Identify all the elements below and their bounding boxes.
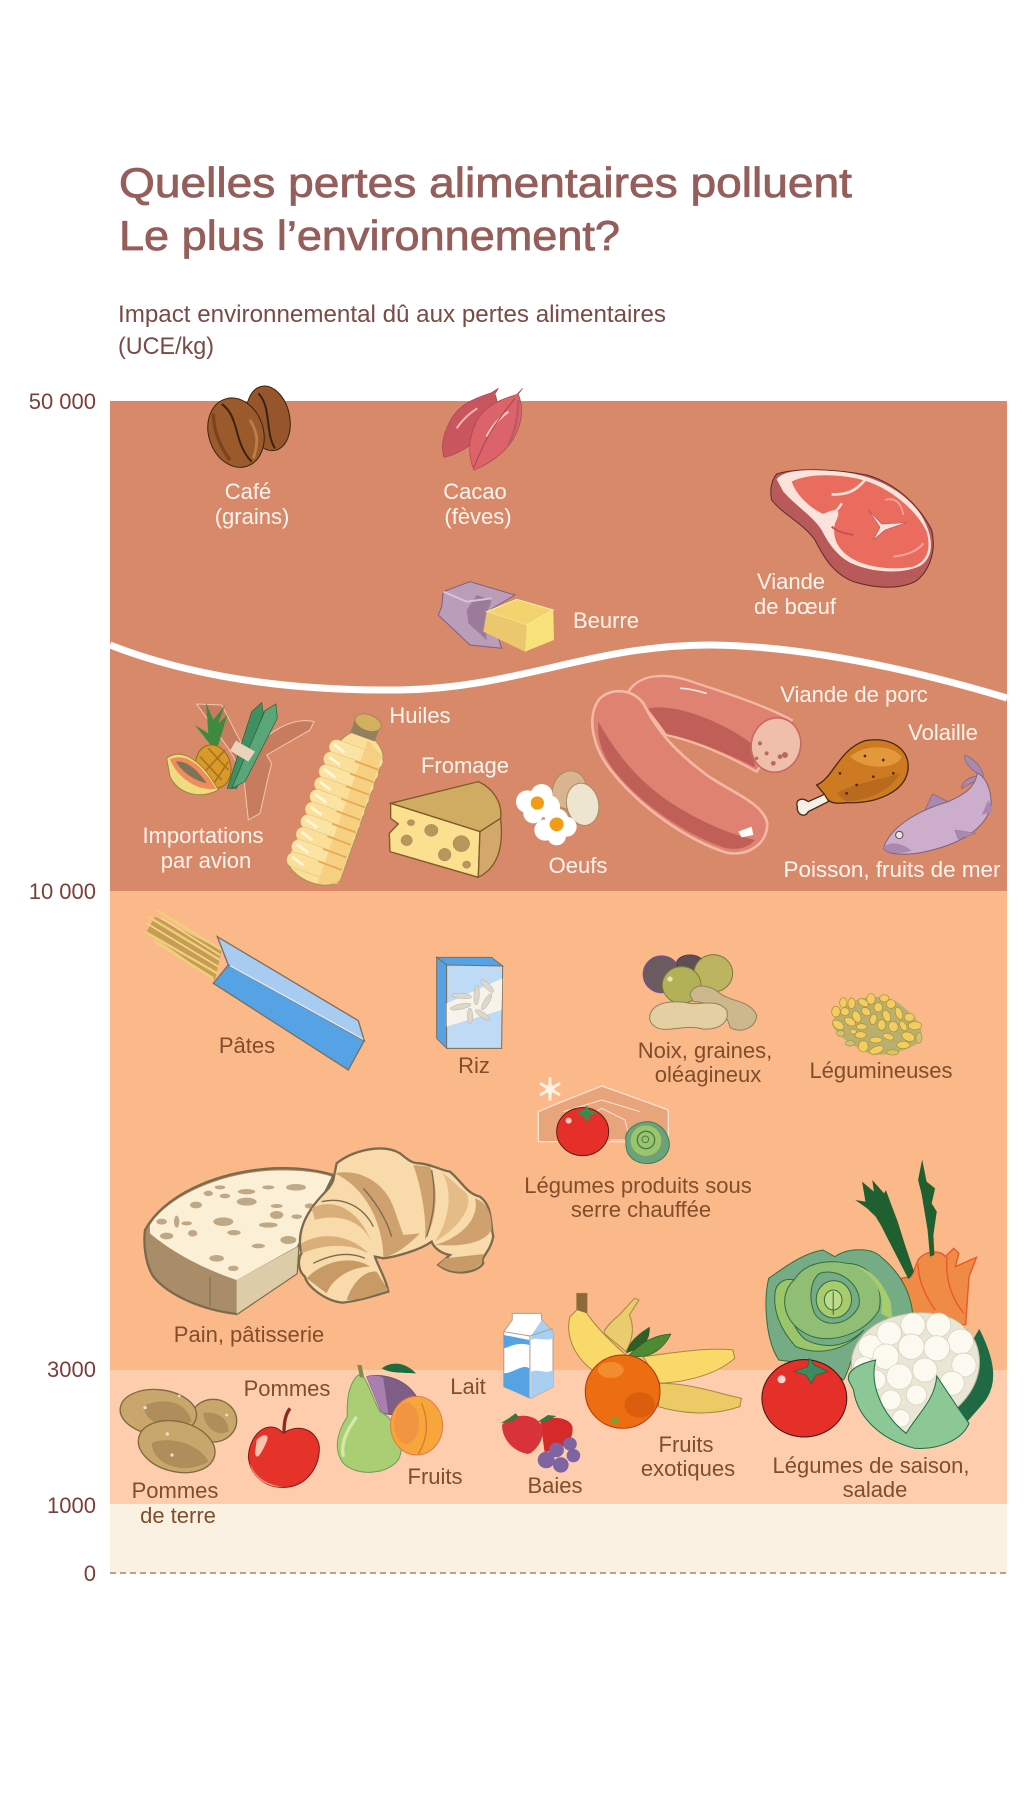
- icon: apple: [248, 1408, 319, 1487]
- label: Noix, graines,: Noix, graines,: [638, 1038, 772, 1063]
- icon: pork sausage: [592, 676, 807, 853]
- icon: pear plum peach: [337, 1364, 443, 1472]
- icon: fish: [883, 755, 993, 854]
- label: grains: (grains): [215, 504, 289, 529]
- label: par avion: par avion: [161, 848, 251, 873]
- icon: beef steak: [771, 470, 933, 587]
- wave divider: [110, 645, 1007, 698]
- label: de bœuf: de bœuf: [754, 594, 837, 619]
- label: Pommes de terre (1): Pommes: [132, 1478, 218, 1503]
- label: Volaille: Volaille: [908, 720, 978, 745]
- icon: butter: [438, 582, 554, 652]
- label: Fruits: Fruits: [408, 1464, 462, 1489]
- label: Baies: Baies: [527, 1473, 583, 1498]
- zero baseline: [110, 1572, 1007, 1574]
- icon: eggs: [516, 766, 603, 845]
- icon: heated greenhouse: [538, 1077, 669, 1164]
- label: Fruits: Fruits: [658, 1432, 714, 1457]
- axis labels: [29, 389, 96, 1586]
- label: Pommes de terre (2): de terre: [140, 1503, 216, 1528]
- axis labels: 1000: [47, 1493, 96, 1518]
- label: salade: salade: [843, 1477, 907, 1502]
- icon: cocoa pods: [442, 388, 523, 470]
- panel: medium impact band: [110, 891, 1007, 1370]
- label: serre chauffée: serre chauffée: [571, 1197, 711, 1222]
- label: Viande de porc: Viande de porc: [780, 682, 928, 707]
- label: Pâtes: Pâtes: [219, 1033, 275, 1058]
- icon: seasonal vegetables: [762, 1159, 993, 1448]
- label: Cacao: Cacao: [443, 479, 507, 504]
- label: oléagineux: oléagineux: [655, 1062, 761, 1087]
- axis labels: 10 000: [29, 879, 96, 904]
- axis labels: 0: [84, 1561, 96, 1586]
- label: Importations: Importations: [142, 823, 264, 848]
- icon: cheese: [389, 782, 501, 877]
- icon: bananas and orange: [569, 1293, 741, 1428]
- icon: coffee beans: [199, 382, 296, 475]
- icon: oil bottle: [282, 705, 397, 892]
- panel: high impact band: [110, 382, 1007, 892]
- label: fèves: (fèves): [444, 504, 512, 529]
- label: Café: Café: [225, 479, 271, 504]
- icon: pasta box: [145, 911, 364, 1070]
- panel: lowest impact band: [110, 1503, 1007, 1573]
- icon: bread and croissant: [144, 1149, 493, 1314]
- label: Pain, pâtisserie: Pain, pâtisserie: [174, 1322, 324, 1347]
- panel: low impact band: [110, 1159, 1007, 1504]
- label: Légumes de saison,: Légumes de saison,: [773, 1453, 969, 1478]
- subtitle: (UCE/kg): [118, 333, 214, 360]
- label: Lait: Lait: [450, 1374, 486, 1399]
- subtitle: Impact environnemental dû aux pertes alimentaires: [118, 301, 666, 328]
- title: [119, 159, 852, 259]
- icon: plane with imports: [167, 703, 314, 820]
- label: Oeufs: Oeufs: [549, 853, 607, 878]
- label: Poisson, fruits de mer: Poisson, fruits de mer: [784, 857, 1000, 882]
- label: Légumineuses: Légumineuses: [809, 1058, 953, 1083]
- axis labels: 3000: [47, 1357, 96, 1382]
- label: Légumes produits sous: Légumes produits sous: [524, 1173, 752, 1198]
- icon: milk carton: [504, 1313, 553, 1398]
- label: Huiles: Huiles: [389, 703, 451, 728]
- icon: legumes: [831, 994, 922, 1056]
- title: Le plus l’environnement?: [119, 212, 620, 259]
- label: Beurre: Beurre: [573, 608, 639, 633]
- icon: rice box: [437, 957, 503, 1048]
- axis labels: 50 000: [29, 389, 96, 414]
- label: Viande: Viande: [757, 569, 825, 594]
- label: exotiques: exotiques: [641, 1456, 735, 1481]
- label: Pommes: Pommes: [244, 1376, 330, 1401]
- subtitle: [118, 301, 666, 360]
- label: Riz: Riz: [458, 1053, 490, 1078]
- label: Fromage: Fromage: [421, 753, 509, 778]
- icon: strawberries and blueberries: [500, 1413, 580, 1473]
- icon: potatoes: [118, 1386, 237, 1480]
- icon: nuts and olives: [643, 955, 757, 1030]
- icon: poultry leg: [797, 740, 908, 815]
- title: Quelles pertes alimentaires polluent: [119, 159, 852, 206]
